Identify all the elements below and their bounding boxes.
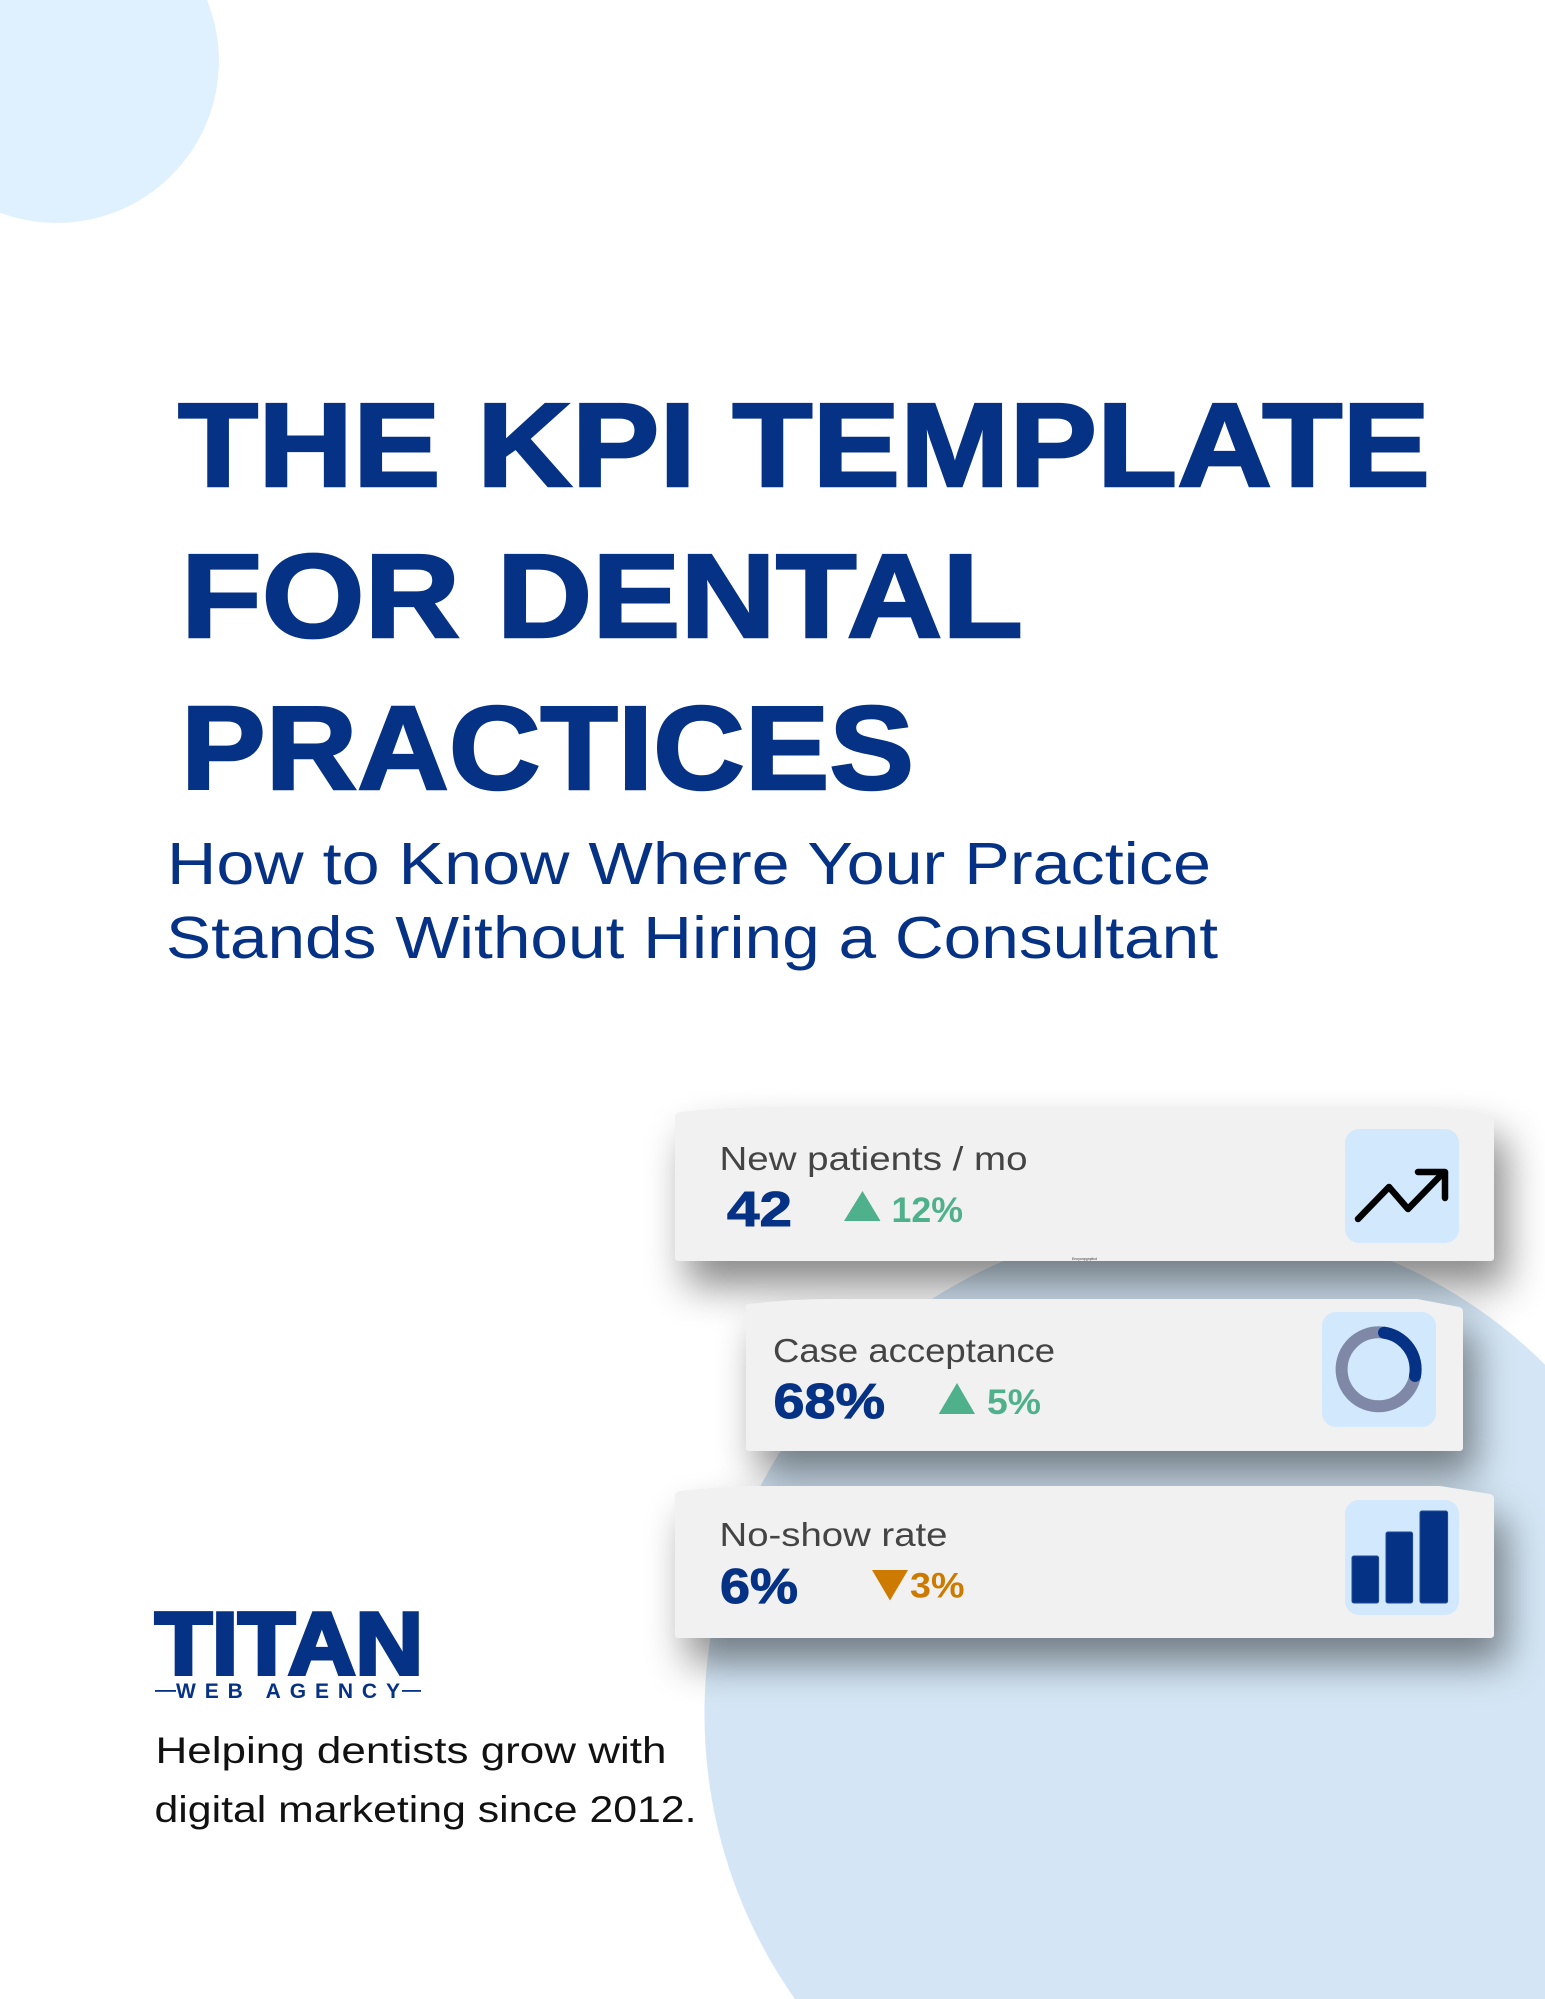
icon box: bar chart xyxy=(1345,1500,1459,1615)
change: 5%: 5% xyxy=(987,1383,1041,1422)
value: 42: 42 xyxy=(727,1183,792,1237)
value: 6%: 6% xyxy=(720,1560,798,1614)
value: 68%: 68% xyxy=(774,1375,885,1429)
card background xyxy=(746,1299,1463,1451)
tagline xyxy=(154,1729,696,1830)
change: 12%: 12% xyxy=(892,1191,963,1230)
card background xyxy=(675,1107,1494,1261)
decorative circle: top left xyxy=(0,0,219,223)
title: THE KPI TEMPLATE xyxy=(178,379,1430,512)
change: 3%: 3% xyxy=(910,1567,964,1606)
logo: Titan Web Agency: WEB AGENCY xyxy=(176,1680,400,1703)
icon box: trend arrow xyxy=(1345,1129,1459,1243)
subtitle: How to Know Where Your Practice xyxy=(167,830,1211,897)
title: FOR DENTAL xyxy=(181,530,1023,663)
panel: new patients card xyxy=(675,1107,1494,1261)
tagline: digital marketing since 2012. xyxy=(154,1788,696,1830)
icon: up triangle xyxy=(939,1383,975,1414)
icon box: donut chart xyxy=(1322,1312,1436,1427)
panel: case acceptance card xyxy=(746,1299,1463,1451)
label: no-show rate: No-show rate xyxy=(720,1517,948,1554)
label: case acceptance: Case acceptance xyxy=(773,1333,1055,1370)
card background xyxy=(675,1486,1494,1638)
icon: up triangle xyxy=(844,1191,880,1221)
tagline: Helping dentists grow with xyxy=(156,1729,666,1771)
label: new patients: New patients / mo xyxy=(720,1141,1028,1178)
icon: down triangle xyxy=(872,1570,908,1600)
tiny caption: Encyonpgnplicd xyxy=(1072,1257,1097,1261)
title xyxy=(178,379,1430,815)
title: PRACTICES xyxy=(181,682,914,815)
panel: no-show rate card xyxy=(675,1486,1494,1638)
subtitle: Stands Without Hiring a Consultant xyxy=(166,904,1219,971)
decorative circle: bottom right xyxy=(704,1221,1545,1999)
logo: Titan Web Agency: TITAN xyxy=(155,1594,423,1693)
subtitle xyxy=(166,830,1219,971)
